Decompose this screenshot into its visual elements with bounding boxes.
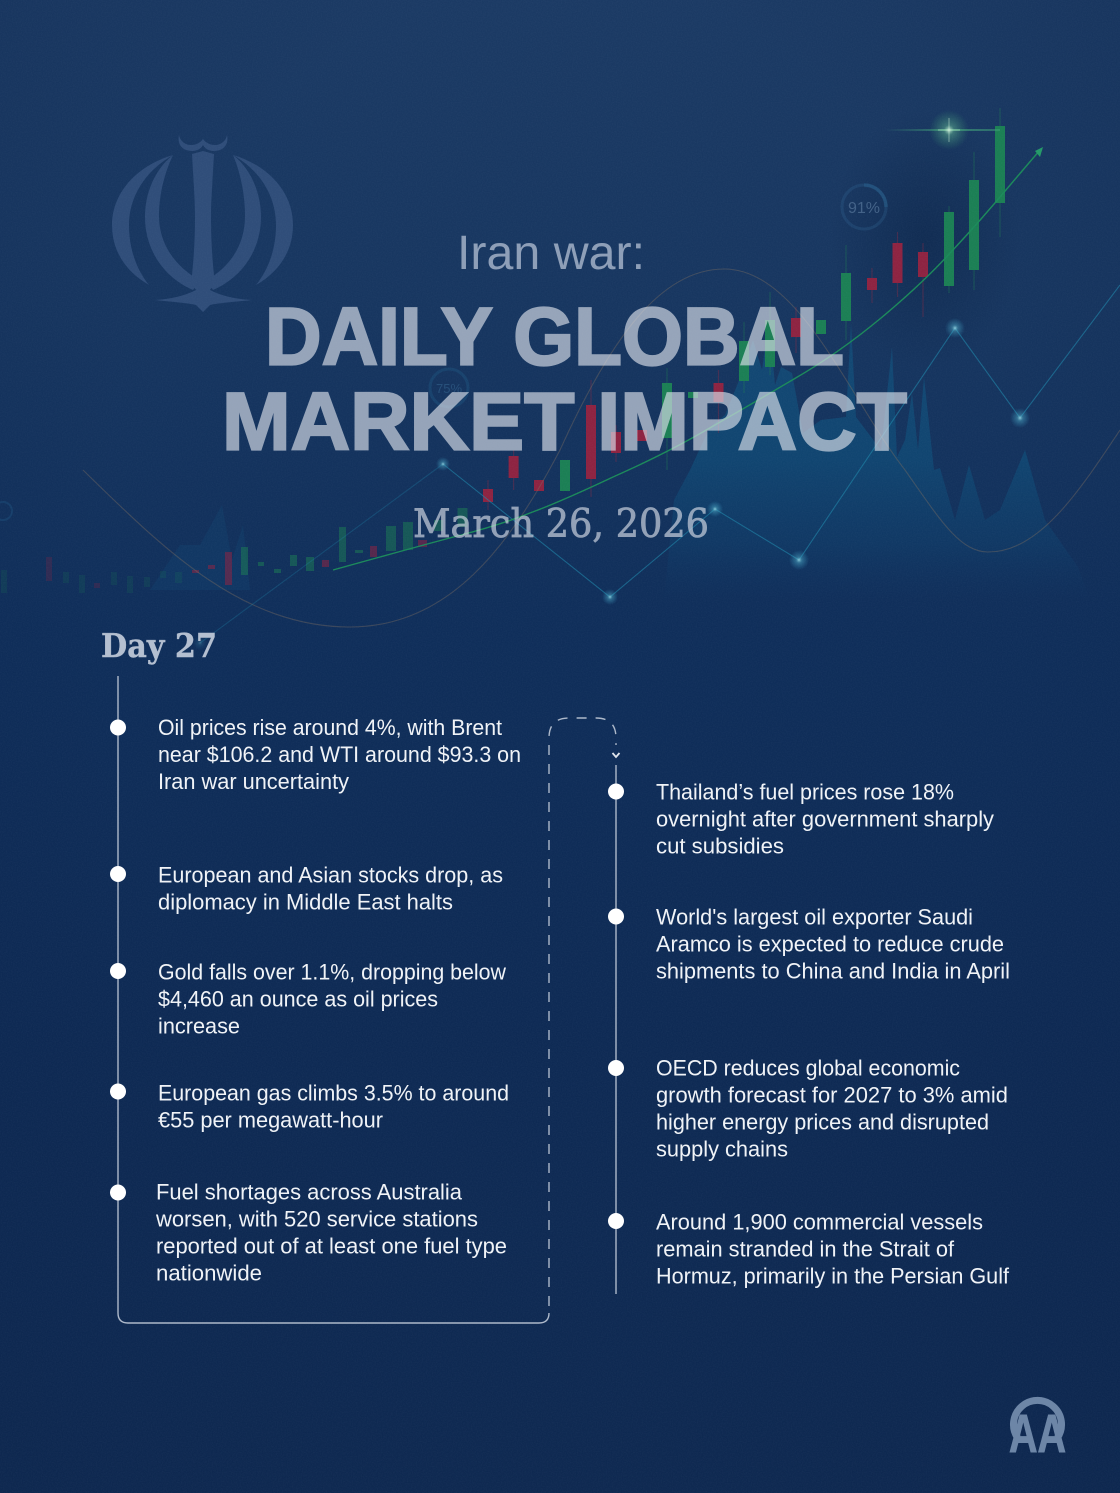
- item: OECD: higher energy prices and disrupted: [656, 1110, 989, 1134]
- item: stocks: diplomacy in Middle East halts: [158, 890, 453, 914]
- item: vessels: [656, 1210, 1010, 1288]
- item: Thailand: overnight after government sharply: [656, 806, 994, 832]
- item: OECD: OECD reduces global economic: [656, 1056, 960, 1080]
- item: stocks: [158, 862, 503, 914]
- item: Saudi Aramco: World's largest oil exporter Saudi: [656, 904, 973, 930]
- logo: Anadolu Agency: AA: [1009, 1404, 1066, 1464]
- gauge: 91%: [842, 185, 886, 229]
- item: European gas: European gas climbs 3.5% to around: [158, 1080, 509, 1106]
- day heading: Day 27: [101, 626, 217, 665]
- timeline dots: [110, 720, 624, 1229]
- item: OECD: supply chains: [656, 1136, 788, 1162]
- subtitle: Iran war: Iran war:: [457, 227, 645, 280]
- item: Saudi Aramco: Aramco is expected to reduce crude: [656, 932, 1004, 956]
- item: gold: $4,460 an ounce as oil prices: [158, 986, 438, 1012]
- timeline connector: [118, 676, 620, 1323]
- green trend arrow: [333, 147, 1043, 570]
- item: Saudi Aramco: [656, 904, 1010, 984]
- emblem of Iran watermark: [112, 135, 293, 312]
- item: Thailand: cut subsidies: [656, 834, 784, 858]
- brown sine curve: [83, 269, 1120, 627]
- item: vessels: Around 1,900 commercial vessels: [656, 1210, 983, 1234]
- item: Australia fuel shortages: worsen, with 520 service stations: [155, 1206, 478, 1232]
- item: gold: Gold falls over 1.1%, dropping below: [158, 960, 506, 984]
- candlestick chart: [1, 108, 1005, 593]
- item: Thailand: [656, 780, 994, 858]
- title block: [222, 227, 907, 547]
- item: European gas: €55 per megawatt-hour: [158, 1108, 383, 1132]
- item: Saudi Aramco: shipments to China and India in April: [656, 958, 1010, 984]
- item: oil prices: Iran war uncertainty: [158, 769, 349, 794]
- item: Australia fuel shortages: reported out of at least one fuel type: [156, 1234, 507, 1258]
- item: oil prices: [158, 715, 521, 794]
- item: Australia fuel shortages: Fuel shortages across Australia: [156, 1180, 463, 1204]
- wicks: [488, 108, 1000, 510]
- gauge: 75%: [430, 369, 468, 407]
- faint left mountain area: [150, 505, 250, 590]
- item: gold: [158, 960, 506, 1038]
- item: Thailand: Thailand’s fuel prices rose 18%: [656, 780, 954, 804]
- teal mountain area chart: [664, 320, 1090, 600]
- item: vessels: Hormuz, primarily in the Persian Gulf: [656, 1264, 1010, 1288]
- network line chart: [193, 285, 1120, 650]
- gauge: 91%: 91%: [848, 200, 880, 217]
- gauge: left edge: [0, 502, 12, 520]
- item: gold: increase: [158, 1014, 240, 1038]
- bright candles: [560, 126, 1005, 491]
- item: OECD: growth forecast for 2027 to 3% amid: [656, 1082, 1008, 1108]
- title line: MARKET IMPACT: MARKET IMPACT: [222, 376, 907, 468]
- item: oil prices: Oil prices rise around 4%, with Brent: [158, 715, 502, 740]
- item: OECD: [656, 1056, 1008, 1162]
- title line: DAILY GLOBAL: DAILY GLOBAL: [265, 292, 844, 382]
- item: oil prices: near $106.2 and WTI around $93.3 on: [158, 742, 521, 767]
- far faded candles: [1, 570, 182, 593]
- item: stocks: European and Asian stocks drop, as: [158, 862, 503, 888]
- item: Australia fuel shortages: [155, 1180, 507, 1286]
- item: Australia fuel shortages: nationwide: [156, 1260, 262, 1286]
- green star flare: [885, 110, 1000, 150]
- gauge: 75%: 75%: [436, 381, 462, 396]
- item: vessels: remain stranded in the Strait of: [656, 1236, 955, 1262]
- mid faded candles: [241, 508, 468, 575]
- date: March 26, 2026: [413, 502, 709, 547]
- dark rocket silhouette shadow: [830, 110, 1020, 370]
- item: European gas: [158, 1080, 509, 1132]
